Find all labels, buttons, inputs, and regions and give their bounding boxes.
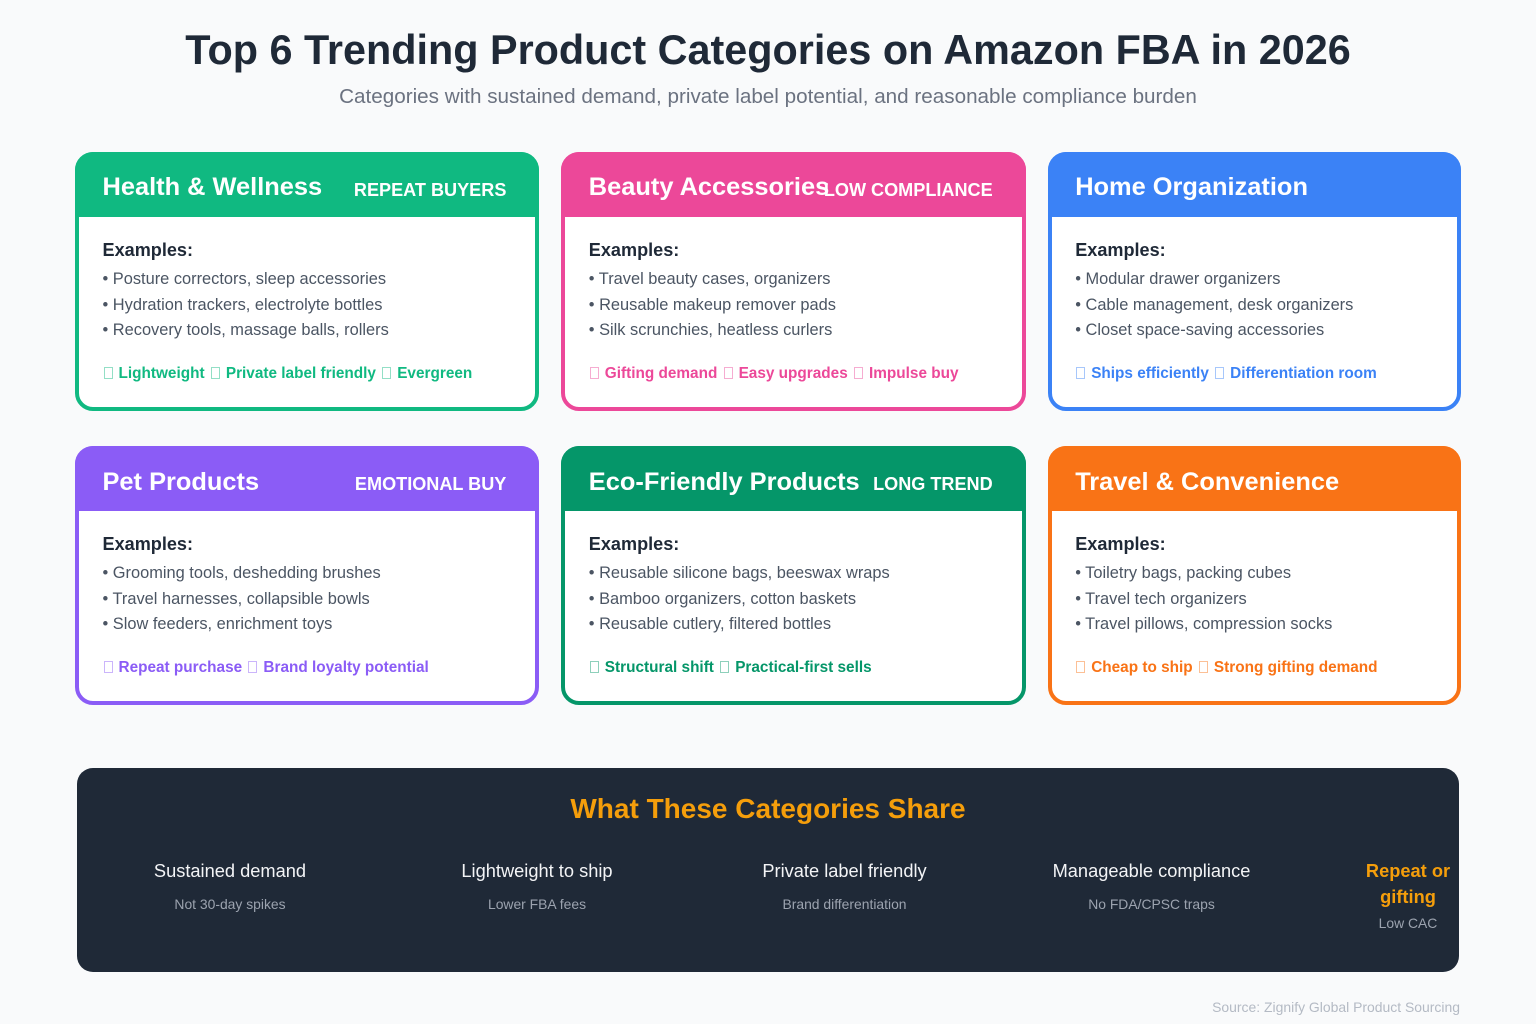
examples list xyxy=(102,564,381,633)
examples list: • Travel pillows, compression socks xyxy=(1075,615,1332,633)
examples list: • Slow feeders, enrichment toys xyxy=(102,615,332,633)
item: manageable compliance xyxy=(1053,860,1250,912)
title: Top 6 Trending Product Categories on Amazon FBA in 2026 xyxy=(185,27,1351,73)
examples list: • Recovery tools, massage balls, rollers xyxy=(102,321,389,339)
examples label: Examples: xyxy=(102,240,193,260)
header: Health & Wellness xyxy=(75,152,539,217)
heading: Eco-Friendly Products: Eco-Friendly Products xyxy=(589,468,860,496)
item: sustained demand: Sustained demand xyxy=(154,860,306,881)
panel: Eco-Friendly Products xyxy=(561,446,1026,705)
badge: long trend: LONG TREND xyxy=(873,474,993,494)
examples list: • Posture correctors, sleep accessories xyxy=(102,270,386,288)
examples list: • Bamboo organizers, cotton baskets xyxy=(589,590,856,608)
tags: Ships efficiently Differentiation room xyxy=(1091,365,1377,382)
item: lightweight to ship: Lightweight to ship xyxy=(461,860,613,881)
examples list: • Closet space-saving accessories xyxy=(1075,321,1324,339)
examples list: • Travel tech organizers xyxy=(1075,590,1247,608)
header: Travel & Convenience xyxy=(1048,446,1461,511)
examples list: • Modular drawer organizers xyxy=(1075,270,1280,288)
panel: Travel & Convenience xyxy=(1048,446,1461,705)
header: Eco-Friendly Products xyxy=(561,446,1026,511)
examples list: • Hydration trackers, electrolyte bottles xyxy=(102,296,382,314)
examples list: • Silk scrunchies, heatless curlers xyxy=(589,321,832,339)
tags: Gifting demand Easy upgrades Impulse buy xyxy=(605,365,959,382)
item: repeat or gifting: Repeat or xyxy=(1366,860,1450,881)
examples list: • Reusable silicone bags, beeswax wraps xyxy=(589,564,890,582)
item: private label friendly: Brand differentiation xyxy=(782,896,907,912)
subtitle: Categories with sustained demand, private label potential, and reasonable compliance burden xyxy=(339,84,1197,108)
tags: Structural shift Practical-first sells xyxy=(605,659,872,676)
badge: repeat buyers: REPEAT BUYERS xyxy=(354,180,506,200)
panel: Beauty Accessories xyxy=(561,152,1026,411)
header: Pet Products xyxy=(75,446,539,511)
panel heading: What These Categories Share xyxy=(570,793,966,824)
examples list xyxy=(589,270,836,339)
examples label: Examples: xyxy=(1075,534,1166,554)
examples label: Examples: xyxy=(589,534,679,554)
examples label: Examples: xyxy=(589,240,679,260)
panel: Pet Products xyxy=(75,446,539,705)
item: manageable compliance: Manageable compliance xyxy=(1053,860,1250,881)
examples list: • Travel harnesses, collapsible bowls xyxy=(102,590,370,608)
item: repeat or gifting: Low CAC xyxy=(1379,915,1437,931)
panel: what these categories share xyxy=(77,768,1459,972)
examples list: • Grooming tools, deshedding brushes xyxy=(102,564,381,582)
item: sustained demand: Not 30-day spikes xyxy=(174,896,286,912)
item: manageable compliance: No FDA/CPSC traps xyxy=(1088,896,1215,912)
heading: Travel & Convenience: Travel & Convenience xyxy=(1075,468,1339,496)
examples list: • Reusable cutlery, filtered bottles xyxy=(589,615,831,633)
tags: Repeat purchase Brand loyalty potential xyxy=(118,659,429,676)
item: private label friendly: Private label friendly xyxy=(762,860,927,881)
item: repeat or gifting: gifting xyxy=(1380,886,1436,907)
header: Home Organization xyxy=(1048,152,1461,217)
heading: Home Organization: Home Organization xyxy=(1075,173,1308,201)
badge: low compliance: LOW COMPLIANCE xyxy=(824,180,993,200)
examples list xyxy=(102,270,389,339)
header: Beauty Accessories xyxy=(561,152,1026,217)
panel: Home Organization xyxy=(1048,152,1461,411)
item: lightweight to ship xyxy=(461,860,613,912)
heading: Pet Products: Pet Products xyxy=(102,468,259,496)
examples list xyxy=(1075,270,1353,339)
examples list: • Cable management, desk organizers xyxy=(1075,296,1353,314)
examples list xyxy=(1075,564,1332,633)
heading: Beauty Accessories: Beauty Accessories xyxy=(589,173,829,201)
heading: Health & Wellness: Health & Wellness xyxy=(102,173,322,201)
tags: Cheap to ship Strong gifting demand xyxy=(1091,659,1378,676)
examples list: • Toiletry bags, packing cubes xyxy=(1075,564,1291,582)
examples label: Examples: xyxy=(1075,240,1166,260)
source note: Source: Zignify Global Product Sourcing xyxy=(1212,998,1460,1014)
badge: emotional buy: EMOTIONAL BUY xyxy=(355,474,506,494)
examples list xyxy=(589,564,890,633)
examples label: Examples: xyxy=(102,534,193,554)
examples list: • Travel beauty cases, organizers xyxy=(589,270,830,288)
item: private label friendly xyxy=(762,860,927,912)
item: repeat or gifting xyxy=(1366,860,1450,931)
item: sustained demand xyxy=(154,860,306,912)
item: lightweight to ship: Lower FBA fees xyxy=(488,896,586,912)
examples list: • Reusable makeup remover pads xyxy=(589,296,836,314)
panel: Health & Wellness xyxy=(75,152,539,411)
tags: Lightweight Private label friendly Evergreen xyxy=(118,365,472,382)
